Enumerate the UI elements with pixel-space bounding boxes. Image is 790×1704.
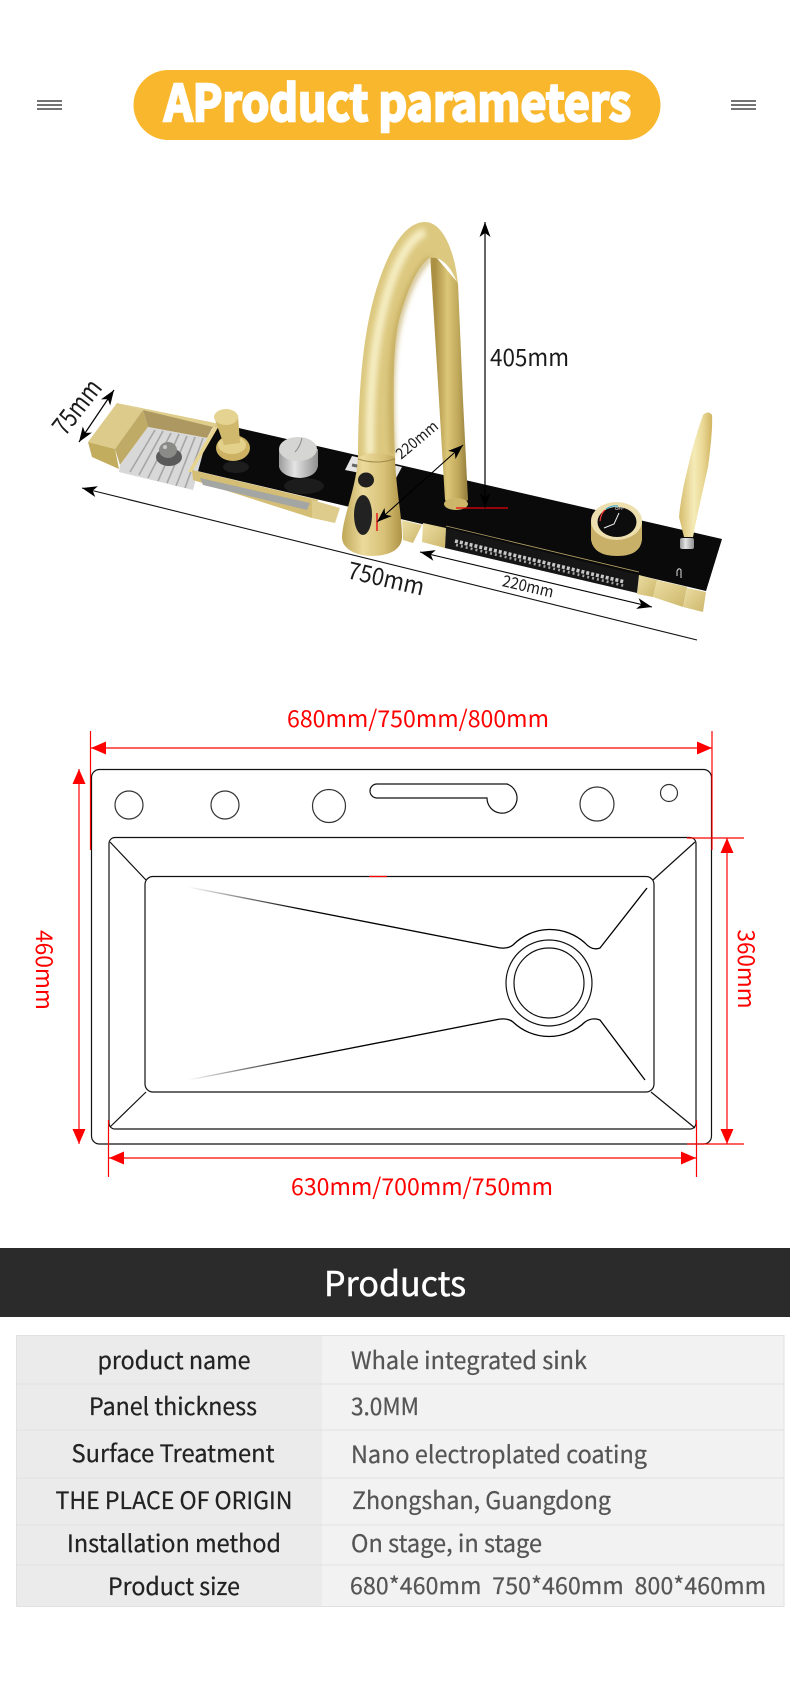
front gold strip with slot (192, 470, 340, 523)
row: place of origin: Zhongshan, Guangdong (352, 1481, 611, 1516)
red dimension: 460mm: 460mm (29, 930, 63, 1010)
sink technical drawing (92, 770, 712, 1144)
dimension: 75mm: 75mm (42, 370, 109, 442)
red dimension: bottom width: 630mm/700mm/750mm (291, 1168, 553, 1202)
row: product name: product name (98, 1341, 250, 1376)
pull-out hand sprayer (677, 412, 712, 578)
dimension: 220mm lower (420, 552, 652, 607)
small red mark (369, 876, 387, 878)
red reference marks (377, 508, 508, 531)
products header bar: Products (324, 1257, 466, 1306)
row: product size (108, 1567, 766, 1602)
faucet right leg (430, 250, 468, 510)
red dimension: top width: 680mm/750mm/800mm (287, 700, 549, 734)
temperature dial: OFF (615, 506, 624, 511)
dimension: 750mm: 750mm (345, 551, 428, 602)
row: product size: 680*460mm 750*460mm 800*460mm (350, 1567, 766, 1601)
pull-out spray head (342, 454, 402, 556)
temperature dial (591, 502, 642, 556)
row: product name: Whale integrated sink (351, 1341, 587, 1376)
dimension: 220mm diagonal (377, 416, 463, 522)
tap holes (115, 784, 678, 822)
black glass panel (193, 423, 722, 591)
photo dimension arrows (42, 222, 697, 640)
title pill: AProduct parameters (163, 64, 631, 136)
slot cut-out (370, 784, 517, 813)
silver knob (279, 437, 324, 494)
gold panel end blocks (402, 520, 706, 612)
row: panel thickness (89, 1387, 419, 1422)
drain nozzle in tray (156, 442, 182, 466)
product specification table (16, 1336, 784, 1606)
row: product name (98, 1341, 587, 1376)
row: installation method: On stage, in stage (351, 1524, 542, 1559)
row: product size: Product size (108, 1567, 240, 1602)
icon: left menu lines (37, 100, 62, 110)
waterfall outlet strip (445, 526, 639, 593)
row: panel thickness: Panel thickness (89, 1387, 257, 1422)
soap dispenser (214, 409, 250, 473)
sticker label (345, 456, 402, 480)
row: installation method (67, 1524, 542, 1559)
dimension: 405mm: 405mm (490, 338, 569, 373)
product photo: waterfall panel with faucet (88, 222, 722, 612)
left tray (88, 403, 220, 490)
row: surface treatment: Surface Treatment (72, 1434, 274, 1469)
icon: right menu lines (731, 100, 756, 110)
products header bar (0, 1248, 790, 1317)
drain (188, 887, 647, 1080)
row: place of origin (56, 1481, 611, 1516)
row: surface treatment: Nano electroplated coating (351, 1435, 647, 1470)
row: surface treatment (72, 1434, 647, 1470)
dimension: 750mm (82, 488, 697, 640)
row: installation method: Installation method (67, 1524, 281, 1559)
faucet spout arch (358, 222, 458, 458)
row: place of origin: THE PLACE OF ORIGIN (56, 1481, 292, 1516)
red dimension: 360mm: 360mm (731, 930, 765, 1008)
row: panel thickness: 3.0MM (351, 1387, 419, 1422)
dimension: 220mm lower: 220mm (500, 568, 556, 603)
dimension: 220mm diagonal: 220mm (391, 416, 443, 464)
